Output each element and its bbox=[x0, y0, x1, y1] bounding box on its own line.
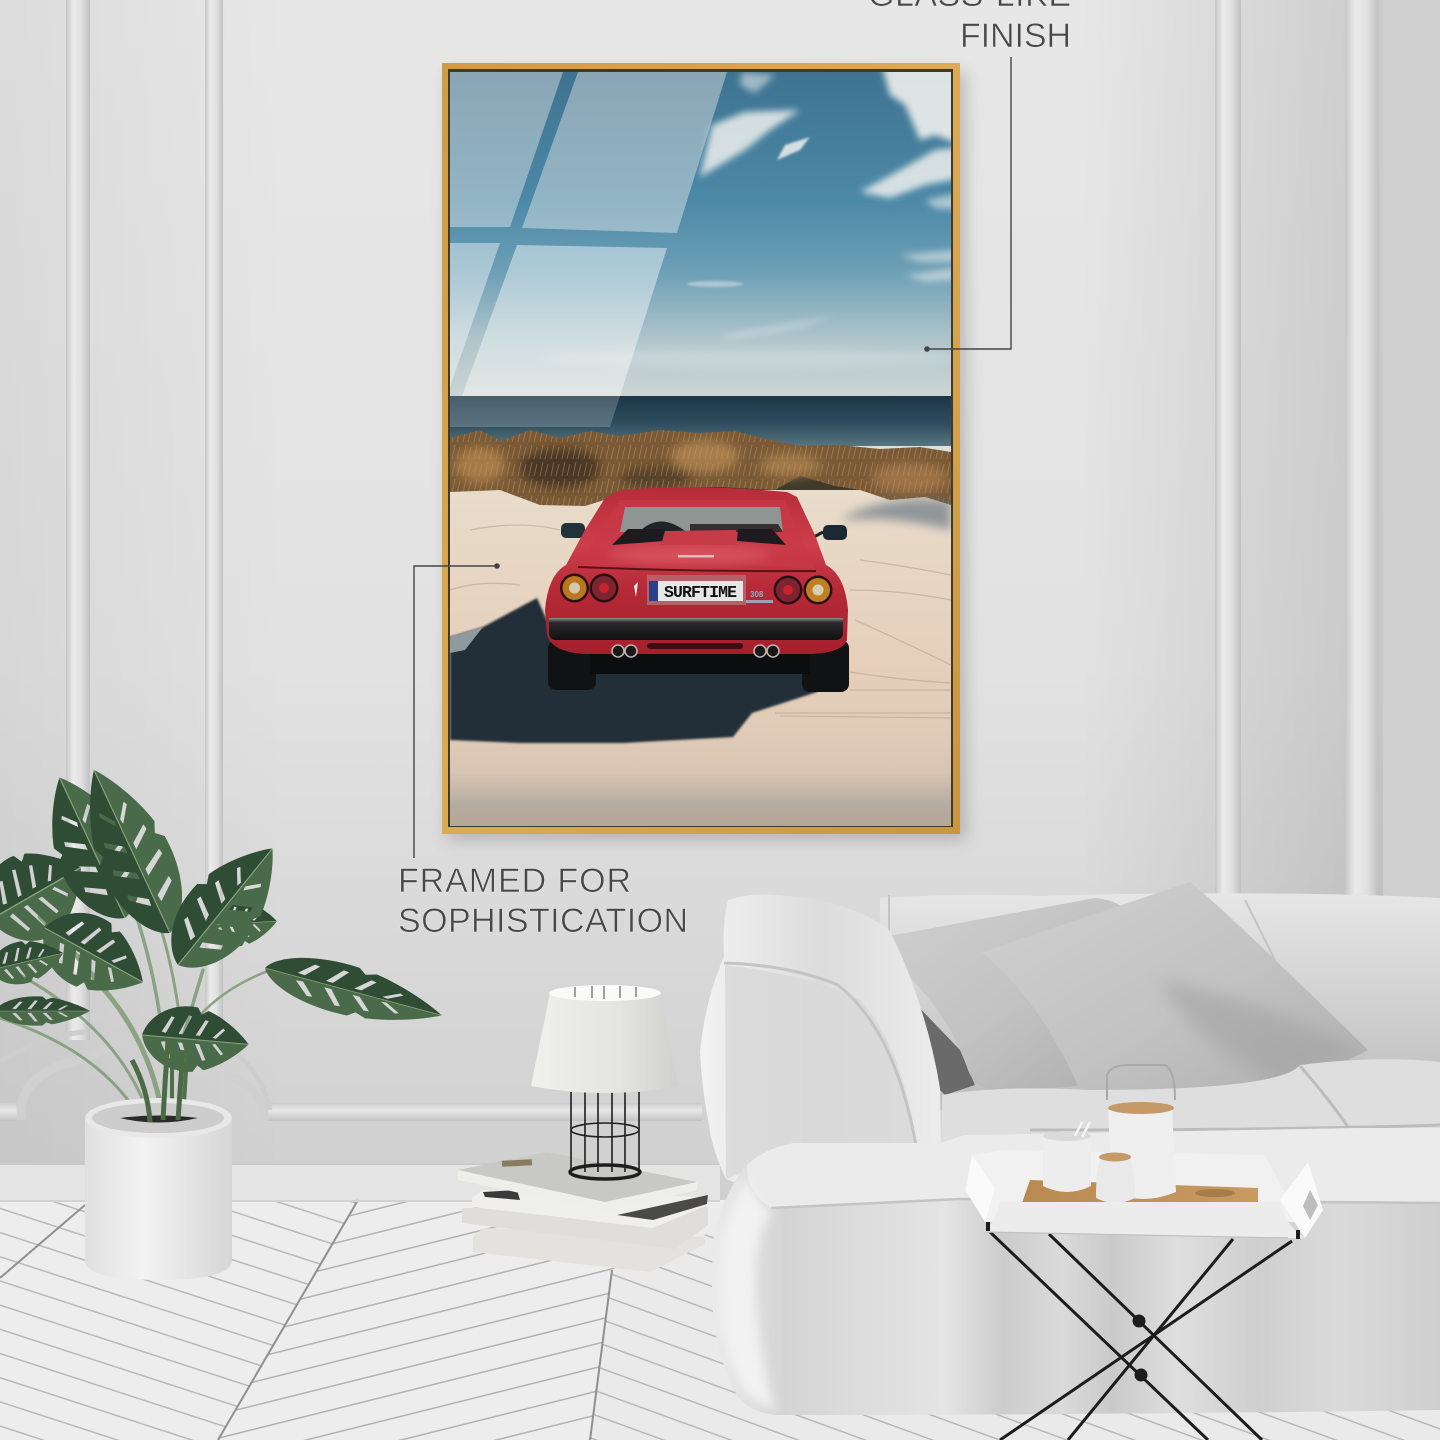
label: glass-like finish: FINISH bbox=[960, 17, 1071, 55]
sand ripples bbox=[450, 525, 951, 718]
sand bbox=[450, 490, 951, 826]
window reflection bbox=[450, 72, 727, 427]
photo: sky bbox=[450, 72, 951, 397]
shade bbox=[531, 993, 678, 1093]
label: framed for sophistication bbox=[398, 862, 688, 940]
bumper bbox=[549, 618, 843, 640]
gold frame bbox=[442, 63, 960, 834]
back cushions bbox=[880, 893, 1440, 1110]
car shadow bbox=[450, 598, 820, 743]
dune shadow bbox=[840, 499, 951, 530]
small jar bbox=[1096, 1160, 1135, 1203]
engine vents bbox=[612, 529, 665, 545]
tail lights bbox=[560, 574, 832, 604]
wooden board bbox=[1022, 1180, 1258, 1205]
label: framed for sophistication: FRAMED FOR bbox=[398, 862, 631, 900]
308 badge: 308 bbox=[750, 590, 764, 599]
cage bbox=[570, 1092, 640, 1179]
side table legs bbox=[990, 1232, 1292, 1440]
mirrors bbox=[585, 532, 823, 538]
back shadow gap bbox=[912, 1000, 975, 1095]
boot line bbox=[578, 567, 816, 571]
leader line: framed for sophistication bbox=[414, 563, 500, 858]
clouds bbox=[540, 60, 975, 367]
plant leaves bbox=[0, 754, 448, 1077]
pillow: back bbox=[868, 898, 1130, 1092]
licence plate bbox=[647, 575, 746, 605]
label: framed for sophistication: SOPHISTICATION bbox=[398, 902, 688, 940]
arm bbox=[700, 895, 941, 1200]
wheels bbox=[548, 640, 596, 690]
label: glass-like finish bbox=[868, 0, 1071, 55]
sea bbox=[450, 396, 951, 446]
plant pot bbox=[85, 1040, 232, 1280]
leader line: glass-like finish bbox=[924, 57, 1011, 352]
licence plate: SURFTIME bbox=[664, 583, 737, 602]
floor: herringbone marble bbox=[0, 1200, 1440, 1440]
books stack bbox=[458, 1152, 708, 1272]
tray with ceramics bbox=[965, 1065, 1323, 1239]
rear window bbox=[620, 507, 783, 532]
car bbox=[545, 487, 849, 692]
seat cushions bbox=[940, 1059, 1440, 1210]
sofa bbox=[700, 882, 1440, 1415]
tray front lip bbox=[985, 1202, 1305, 1238]
cup bbox=[1043, 1136, 1091, 1192]
plant stems bbox=[0, 893, 285, 1118]
panel: framed artwork bbox=[442, 60, 975, 840]
badge bbox=[634, 582, 638, 597]
body bbox=[545, 487, 848, 654]
large jar bbox=[1108, 1107, 1176, 1199]
table lamp bbox=[531, 985, 678, 1179]
pillow: front bbox=[982, 882, 1368, 1101]
tray bbox=[965, 1150, 1300, 1222]
exhausts bbox=[647, 643, 743, 649]
dune grass bbox=[450, 430, 951, 506]
frame shadow bbox=[448, 72, 966, 840]
front seat bbox=[712, 1128, 1440, 1415]
